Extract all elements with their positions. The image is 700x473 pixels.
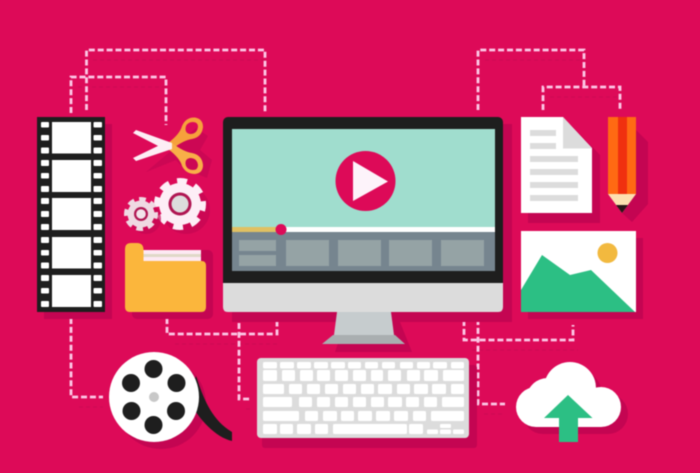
icon: scissors	[133, 117, 212, 178]
video screen	[232, 129, 495, 227]
icon: folder	[125, 243, 213, 319]
monitor bezel	[223, 117, 503, 292]
icon: film reel	[109, 352, 232, 449]
panel: desktop monitor	[223, 117, 512, 352]
timeline bar	[232, 227, 495, 232]
dashed connector lines	[71, 50, 620, 414]
icon: keyboard	[257, 358, 477, 448]
icon: document	[521, 117, 600, 223]
icon: pencil	[608, 117, 648, 222]
icon: small gear	[126, 200, 161, 234]
icon: cloud upload	[516, 362, 628, 442]
icon: large gear	[158, 182, 210, 234]
icon: landscape picture	[521, 231, 643, 319]
thumbnail tray	[232, 232, 495, 271]
play button	[336, 151, 396, 211]
monitor stand	[334, 312, 394, 335]
monitor foot	[322, 335, 405, 344]
icon: film strip	[37, 117, 112, 319]
monitor chin	[223, 283, 503, 312]
playhead	[276, 224, 286, 235]
